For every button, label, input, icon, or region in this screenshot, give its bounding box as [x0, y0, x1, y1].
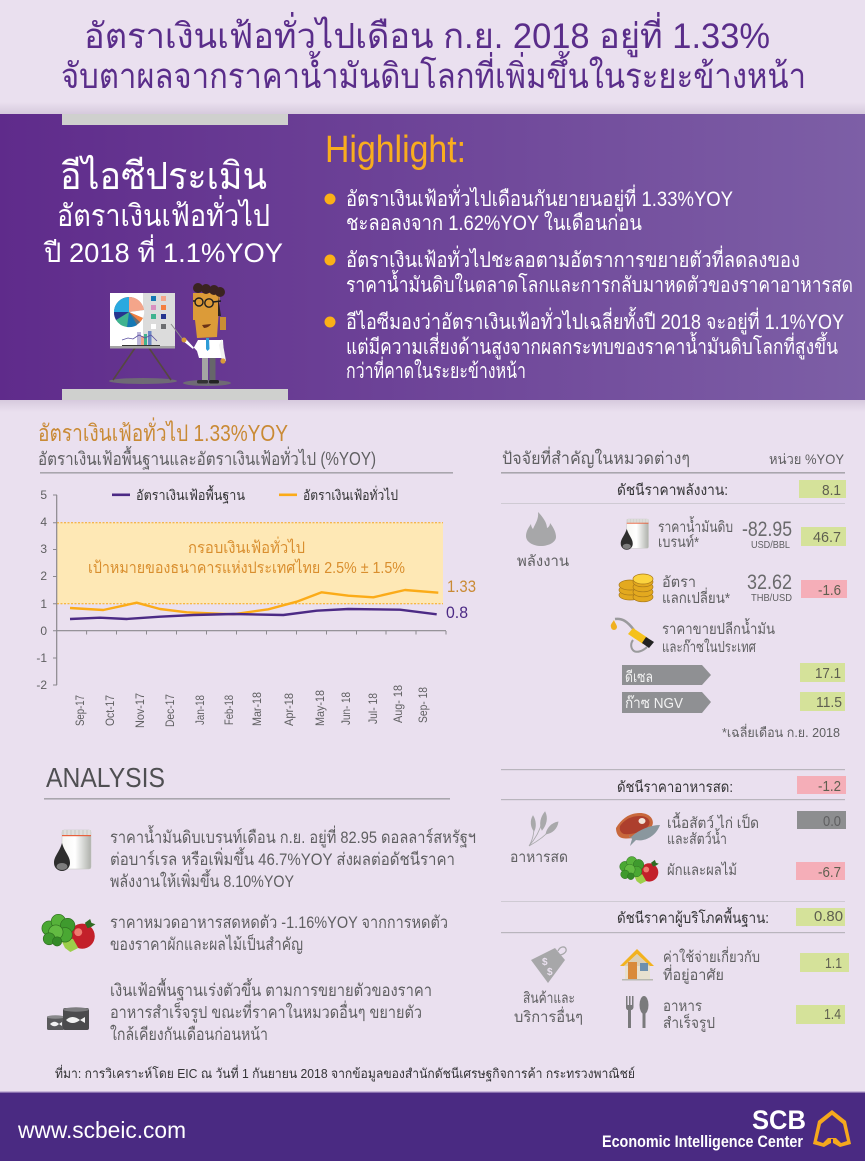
- row: exchange rate: [662, 571, 847, 607]
- heading: EIC estimate: ปี 2018 ที่ 1.1%YOY: [43, 234, 283, 268]
- brand: [602, 1105, 806, 1151]
- text block: oil: พลังงานให้เพิ่มขึ้น 8.10%YOY: [110, 869, 294, 891]
- icon: meat and fish: [616, 813, 660, 846]
- row: brent: เบรนท์*: [658, 534, 699, 551]
- label: other goods: บริการอื่นๆ: [514, 1006, 583, 1026]
- chart axes: 2: [40, 569, 47, 583]
- row: diesel: 17.1: [815, 665, 841, 682]
- chart axes: [36, 488, 446, 728]
- title: อัตราเงินเฟ้อทั่วไปเดือน ก.ย. 2018 อยู่ที่ 1.33%: [84, 12, 770, 57]
- icon: oil tank: [54, 830, 91, 871]
- row: housing: [663, 946, 849, 984]
- icon: oil tank: [621, 519, 648, 550]
- row: housing: 1.1: [825, 955, 842, 972]
- chart axes: 3: [40, 542, 47, 556]
- text block: highlight bullet 1: [324, 184, 733, 235]
- icon: coins: [619, 574, 653, 602]
- fresh food index row: ดัชนีราคาอาหารสด:: [617, 779, 733, 796]
- text block: oil: [110, 825, 476, 891]
- legend: อัตราเงินเฟ้อพื้นฐาน: [136, 485, 245, 504]
- chart axes: Jun- 18: [339, 692, 353, 725]
- icon: vegetables: [42, 914, 95, 952]
- text block: oil: ต่อบาร์เรล หรือเพิ่มขึ้น 46.7%YOY ส่งผลต่อดัชนีราคา: [110, 847, 455, 869]
- chart axes: 0: [40, 624, 47, 638]
- panel: key factors: [501, 446, 849, 1032]
- energy index row: 8.1: [822, 482, 841, 499]
- row: housing: ที่อยู่อาศัย: [663, 964, 724, 984]
- icon: SCB logo: [813, 1110, 851, 1147]
- text block: core inflation: ใกล้เคียงกันเดือนก่อนหน้า: [110, 1024, 268, 1044]
- text block: core inflation: อาหารสำเร็จรูป ขณะที่ราคาในหมวดอื่นๆ ขยายตัว: [110, 1000, 422, 1023]
- target band: [57, 523, 443, 604]
- title: [61, 12, 806, 96]
- target band: เป้าหมายของธนาคารแห่งประเทศไทย 2.5% ± 1.5%: [88, 558, 405, 577]
- row: brent: [658, 516, 846, 551]
- text block: oil: ราคาน้ำมันดิบเบรนท์เดือน ก.ย. อยู่ที่ 82.95 ดอลลาร์สหรัฐฯ: [110, 825, 476, 848]
- chart axes: Sep- 18: [416, 687, 430, 723]
- row: exchange rate: แลกเปลี่ยน*: [662, 587, 730, 607]
- chart axes: Jan-18: [193, 695, 207, 725]
- chart axes: Feb-18: [222, 695, 236, 725]
- brand: Economic Intelligence Center: [602, 1132, 803, 1151]
- text block: retail fuel: และก๊าซในประเทศ: [662, 638, 756, 656]
- fresh food index row: -1.2: [818, 778, 841, 795]
- text block: food: ราคาหมวดอาหารสดหดตัว -1.16%YOY จากการหดตัว: [110, 913, 448, 932]
- panel: analysis: [42, 762, 476, 1044]
- row: brent: 46.7: [813, 529, 841, 546]
- chart axes: May-18: [313, 690, 327, 726]
- heading: factors: ปัจจัยที่สำคัญในหมวดต่างๆ: [502, 446, 690, 468]
- icon: house: [620, 949, 654, 980]
- row: meat: และสัตว์น้ำ: [667, 828, 727, 848]
- text block: retail fuel: [662, 618, 775, 656]
- panel: purple highlight band: [0, 102, 865, 412]
- energy index row: ดัชนีราคาพลังงาน:: [617, 482, 728, 499]
- text block: highlight bullet 3: กว่าที่คาดในระยะข้างหน้า: [346, 356, 526, 383]
- icon: price tag: [531, 947, 566, 983]
- text block: retail fuel: ราคาขายปลีกน้ำมัน: [662, 618, 775, 638]
- heading: headline inflation: อัตราเงินเฟ้อทั่วไป 1.33%YOY: [38, 417, 288, 446]
- chart axes: 1: [40, 597, 47, 611]
- heading: EIC estimate: [43, 155, 283, 268]
- row: meat: 0.0: [823, 813, 841, 830]
- icon: canned fish: [47, 1007, 89, 1030]
- core CPI row: 0.80: [814, 908, 843, 925]
- label: other goods: [514, 990, 583, 1026]
- brand: SCB: [752, 1105, 806, 1135]
- row: prepared food: สำเร็จรูป: [663, 1013, 715, 1032]
- row: brent: USD/BBL: [751, 539, 790, 551]
- text block: food: [110, 913, 448, 954]
- heading: factors: [502, 446, 845, 468]
- row: diesel: [622, 663, 845, 686]
- chart axes: Nov-17: [133, 693, 147, 728]
- row: exchange rate: อัตรา: [662, 574, 696, 591]
- chart axes: Mar-18: [250, 692, 264, 726]
- icon: presenter with chart board: [109, 283, 231, 386]
- legend: อัตราเงินเฟ้อทั่วไป: [303, 486, 398, 503]
- label: energy: พลังงาน: [517, 553, 569, 570]
- row: housing: ค่าใช้จ่ายเกี่ยวกับ: [663, 946, 760, 966]
- core CPI row: [617, 907, 845, 927]
- text block: highlight bullet 3: [324, 307, 844, 383]
- label: fresh food: อาหารสด: [510, 849, 568, 866]
- panel: inflation chart: [36, 417, 476, 728]
- row: prepared food: 1.4: [824, 1006, 841, 1023]
- text block: highlight bullet 1: อัตราเงินเฟ้อทั่วไปเดือนกันยายนอยู่ที่ 1.33%YOY: [346, 184, 733, 212]
- text block: highlight bullet 1: ชะลอลงจาก 1.62%YOY ในเดือนก่อน: [346, 211, 642, 235]
- core CPI row: ดัชนีราคาผู้บริโภคพื้นฐาน:: [617, 907, 769, 927]
- row: brent: -82.95: [742, 518, 792, 541]
- heading: EIC estimate: อัตราเงินเฟ้อทั่วไป: [57, 195, 270, 233]
- chart axes: Apr-18: [282, 693, 296, 726]
- fresh food index row: [617, 776, 846, 796]
- heading: Highlight: Highlight:: [325, 129, 466, 171]
- chart axes: Jul- 18: [366, 693, 380, 724]
- row: exchange rate: 32.62: [747, 571, 792, 594]
- value label: core: 0.8: [446, 603, 468, 622]
- footnote: average: *เฉลี่ยเดือน ก.ย. 2018: [722, 724, 840, 740]
- heading: analysis: ANALYSIS: [46, 762, 165, 793]
- row: meat: [667, 811, 846, 848]
- row: diesel: ดีเซล: [625, 669, 653, 686]
- text block: highlight bullet 2: [324, 245, 853, 297]
- label: other goods: สินค้าและ: [523, 990, 575, 1007]
- icon: price tag: $: [542, 957, 548, 968]
- row: vegetables: -6.7: [818, 864, 841, 881]
- chart axes: -1: [36, 651, 47, 665]
- text block: highlight bullet 2: อัตราเงินเฟ้อทั่วไปชะลอตามอัตราการขยายตัวที่ลดลงของ: [346, 245, 800, 272]
- chart axes: 5: [40, 488, 47, 502]
- heading: chart subtitle: อัตราเงินเฟ้อพื้นฐานและอัตราเงินเฟ้อทั่วไป (%YOY): [38, 446, 376, 470]
- row: exchange rate: THB/USD: [751, 592, 792, 604]
- chart axes: Oct-17: [103, 695, 117, 726]
- heading: EIC estimate: อีไอซีประเมิน: [60, 155, 267, 198]
- icon: vegetables: [620, 857, 659, 884]
- chart axes: 4: [40, 515, 47, 529]
- chart axes: Dec-17: [163, 694, 177, 727]
- row: NGV: ก๊าซ NGV: [625, 695, 683, 712]
- value label: headline: 1.33: [447, 577, 476, 596]
- icon: fuel nozzle: [611, 619, 654, 652]
- row: prepared food: [663, 998, 845, 1032]
- heading: factors: หน่วย %YOY: [769, 451, 845, 467]
- icon: fork and spoon: [626, 996, 648, 1028]
- icon: price tag: $: [547, 967, 553, 978]
- legend: [112, 485, 398, 504]
- line: core inflation: [70, 609, 437, 619]
- text block: food: ของราคาผักและผลไม้เป็นสำคัญ: [110, 933, 303, 954]
- chart axes: Sep-17: [73, 695, 87, 726]
- text block: core inflation: เงินเฟ้อพื้นฐานเร่งตัวขึ้น ตามการขยายตัวของราคา: [110, 978, 432, 1001]
- icon: flame: [526, 512, 556, 546]
- line: headline inflation: [70, 590, 438, 614]
- icon: wheat: [529, 812, 558, 846]
- row: NGV: [622, 692, 845, 713]
- row: meat: เนื้อสัตว์ ไก่ เป็ด: [667, 812, 759, 832]
- row: exchange rate: -1.6: [818, 582, 841, 599]
- chart axes: -2: [36, 678, 47, 692]
- website: www.scbeic.com: [17, 1117, 186, 1143]
- footer: [0, 1091, 865, 1161]
- row: prepared food: อาหาร: [663, 998, 702, 1015]
- energy index row: [617, 480, 846, 499]
- text block: core inflation: [110, 978, 432, 1044]
- row: NGV: 11.5: [816, 694, 842, 711]
- row: brent: ราคาน้ำมันดิบ: [658, 516, 733, 536]
- row: vegetables: [667, 861, 845, 881]
- chart axes: Aug- 18: [391, 685, 405, 723]
- source note: ที่มา: การวิเคราะห์โดย EIC ณ วันที่ 1 กันยายน 2018 จากข้อมูลของสำนักดัชนีเศรษฐกิจการค้า กระทรวงพาณิชย์: [55, 1065, 635, 1082]
- row: vegetables: ผักและผลไม้: [667, 861, 737, 879]
- target band: กรอบเงินเฟ้อทั่วไป: [188, 536, 305, 557]
